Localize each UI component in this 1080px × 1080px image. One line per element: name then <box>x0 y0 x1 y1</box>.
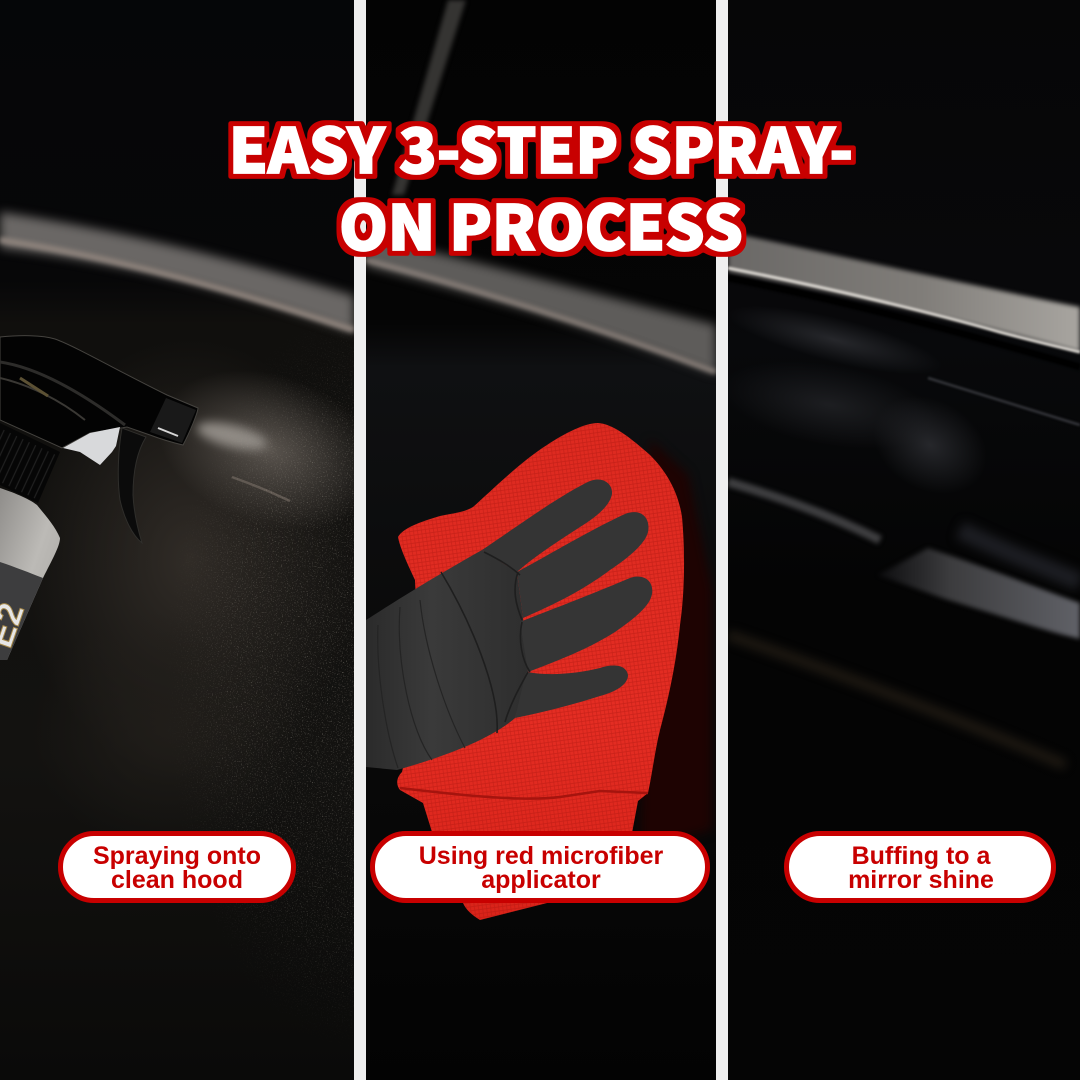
white trigger guard <box>63 427 120 465</box>
label pill: buffing <box>786 834 1054 900</box>
cloth fold hem <box>400 788 648 799</box>
panel: step 2 microfiber applicator <box>366 0 716 1080</box>
label pill: buffing: Buffing to a <box>852 842 992 870</box>
sprayer head <box>0 336 198 448</box>
panel: step 3 buffed mirror shine <box>715 0 1080 1080</box>
index finger <box>482 479 612 572</box>
surface speckle <box>175 337 354 1026</box>
label pill: buffing: mirror shine <box>848 866 994 894</box>
faint vertical streak <box>392 0 466 195</box>
trigger <box>118 428 146 543</box>
cloth shadow <box>640 440 712 850</box>
title: EASY 3-STEP SPRAY- <box>229 101 853 191</box>
chrome trim highlight <box>0 212 354 333</box>
finger creases and wrinkles <box>441 552 530 733</box>
label pill: microfiber <box>372 834 708 900</box>
label pill: microfiber: Using red microfiber <box>419 842 664 870</box>
bottle label <box>0 562 43 660</box>
title: ON PROCESS <box>339 178 743 268</box>
spray mist haze <box>66 375 354 778</box>
black nitrile glove <box>366 479 652 770</box>
bottle collar <box>0 423 60 503</box>
palm <box>366 550 528 770</box>
panel: step 1 spraying onto hood <box>0 0 354 1080</box>
label pill: spraying: Spraying onto <box>93 842 261 870</box>
spray bottle <box>0 336 198 660</box>
chrome trim highlight <box>728 232 1080 367</box>
pinky finger <box>515 666 628 718</box>
window trim reflection <box>366 236 716 374</box>
ring finger <box>520 577 652 672</box>
label pill: microfiber: applicator <box>481 866 601 894</box>
middle finger <box>517 512 648 618</box>
label pill: spraying: clean hood <box>111 866 243 894</box>
red microfiber cloth <box>397 423 684 920</box>
glossy reflections <box>715 292 1080 765</box>
title <box>229 101 853 268</box>
bottle body <box>0 488 60 660</box>
label pill: spraying <box>60 834 294 900</box>
